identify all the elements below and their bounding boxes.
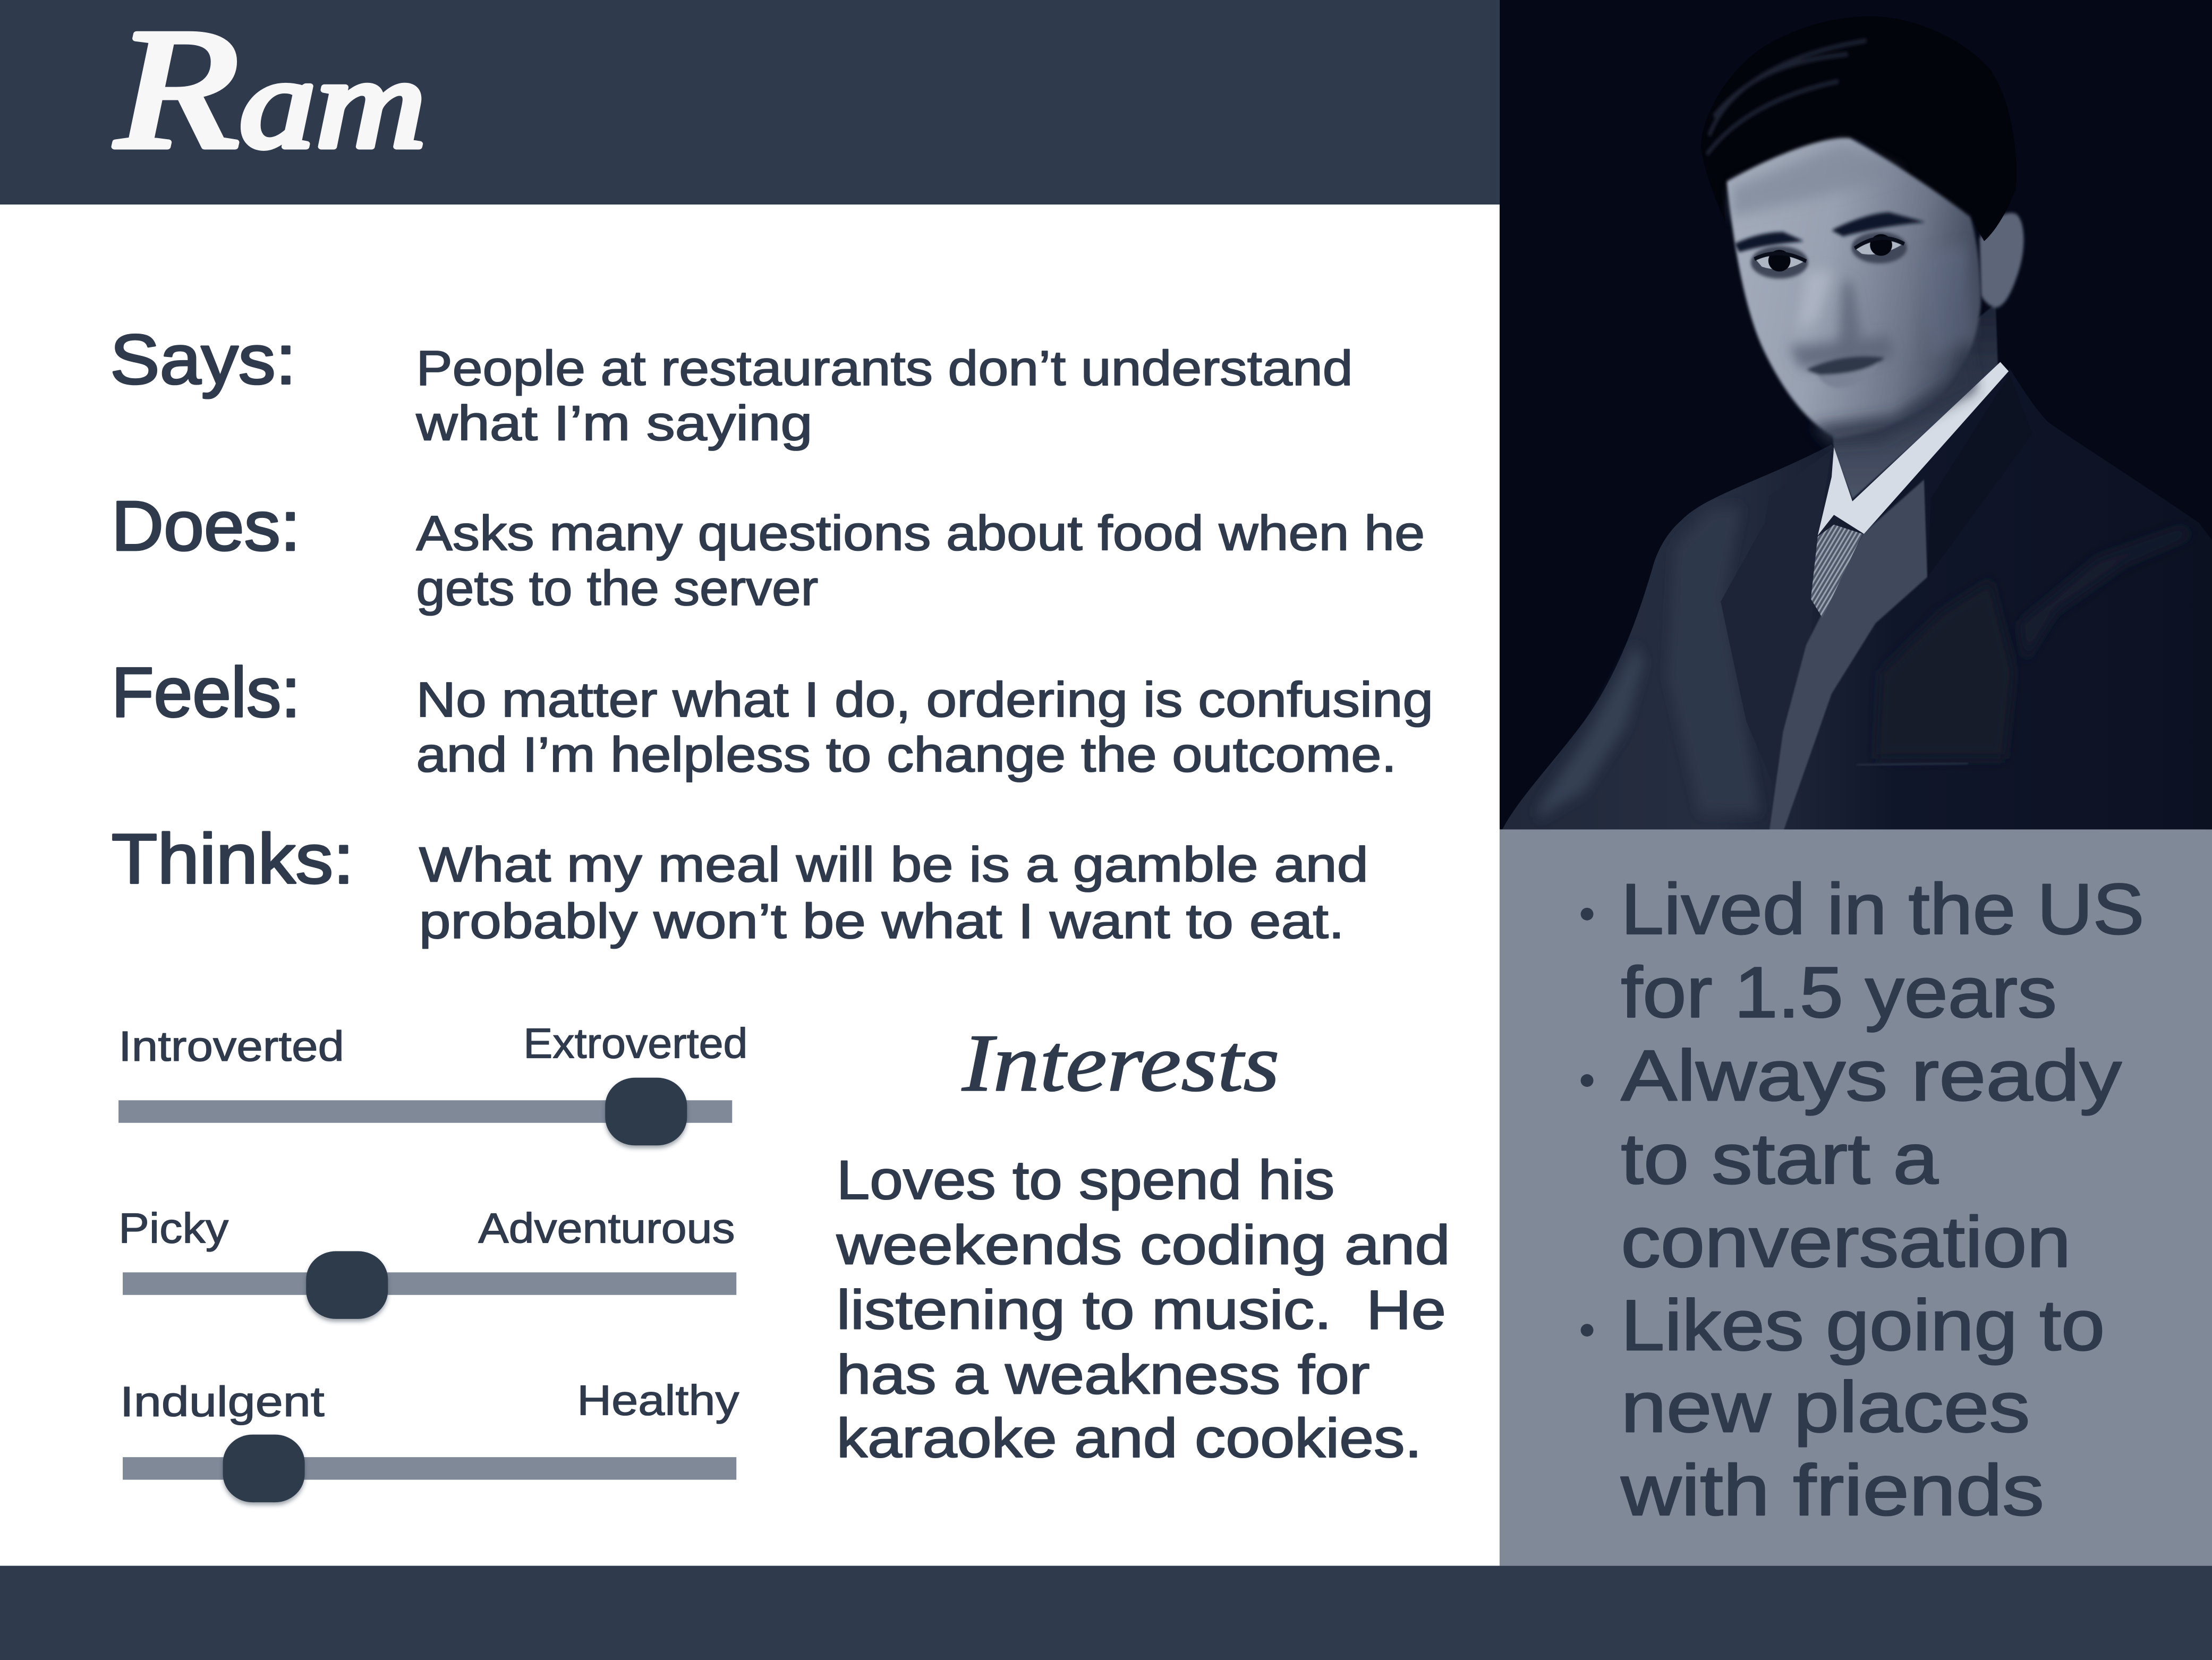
- interests text: has a weakness for: [837, 1344, 1370, 1406]
- interests text: karaoke and cookies.: [837, 1407, 1422, 1469]
- eyes: [1751, 232, 1907, 278]
- thinks text: [419, 837, 1368, 949]
- slider: indulgent to healthy: Healthy: [577, 1376, 739, 1424]
- lips: [1806, 356, 1885, 388]
- face: [1726, 138, 1981, 438]
- neck: [1832, 303, 1998, 499]
- says text: People at restaurants don’t understand: [416, 340, 1353, 396]
- slider: indulgent to healthy: Indulgent: [120, 1378, 325, 1425]
- left lapel: [1721, 571, 1752, 735]
- bullet list: Always ready: [1621, 1035, 2122, 1116]
- jacket: [1501, 369, 2212, 832]
- slider: picky to adventurous: Picky: [118, 1205, 228, 1252]
- says text: what I’m saying: [415, 396, 813, 451]
- ear: [1979, 213, 2024, 308]
- right lapel: [1928, 504, 1931, 560]
- interests text: listening to music. He: [837, 1279, 1446, 1340]
- feels text: No matter what I do, ordering is confusing: [416, 672, 1433, 727]
- says text: [415, 340, 1353, 451]
- bullet list: Likes going to: [1621, 1284, 2105, 1365]
- feels text: [416, 672, 1433, 782]
- bullet list: for 1.5 years: [1621, 952, 2057, 1033]
- heading: interests: Interests: [962, 1018, 1280, 1109]
- slider: introverted to extroverted: Extroverted: [523, 1020, 747, 1067]
- bullet list: conversation: [1621, 1202, 2071, 1282]
- sleeve highlights: [1538, 507, 2194, 819]
- slider: picky to adventurous: Adventurous: [478, 1205, 735, 1252]
- panel: background facts: [1500, 829, 2212, 1566]
- interests text: Loves to spend his: [837, 1149, 1334, 1211]
- heading: says: Says:: [110, 320, 296, 399]
- hair: [1701, 16, 2017, 241]
- does text: Asks many questions about food when he: [416, 506, 1425, 561]
- row: thinks: [112, 820, 1368, 949]
- bullet list: with friends: [1620, 1450, 2044, 1530]
- bullet list: [1581, 869, 2145, 1530]
- interests text: [836, 1149, 1450, 1469]
- heading: does: Does:: [112, 487, 301, 566]
- pocket: [1857, 763, 1968, 765]
- heading: thinks: Thinks:: [112, 820, 354, 898]
- thinks text: What my meal will be is a gamble and: [419, 837, 1368, 892]
- shirt collar: [1818, 362, 2009, 535]
- slider: indulgent to healthy: [120, 1376, 739, 1502]
- thinks text: probably won’t be what I want to eat.: [419, 893, 1345, 949]
- photo: portrait of Ram: [1500, 0, 2212, 832]
- row: feels: [112, 653, 1433, 782]
- bullet list: to start a: [1621, 1118, 1939, 1199]
- header band: [0, 0, 1500, 205]
- white content panel: [0, 205, 1500, 1566]
- bullet list: new places: [1621, 1366, 2030, 1447]
- feels text: and I’m helpless to change the outcome.: [416, 727, 1397, 782]
- does text: gets to the server: [416, 560, 818, 616]
- bullet list: Lived in the US: [1621, 869, 2145, 949]
- slider: introverted to extroverted: Introverted: [118, 1023, 344, 1070]
- footer band: [0, 1566, 2212, 1660]
- slider: introverted to extroverted: [118, 1020, 747, 1145]
- eyebrows: [1734, 212, 1926, 252]
- heading: feels: Feels:: [112, 653, 301, 732]
- does text: [416, 506, 1425, 616]
- interests text: weekends coding and: [836, 1214, 1450, 1275]
- tie: [1811, 525, 1862, 618]
- slider: picky to adventurous: [118, 1205, 736, 1319]
- face shading: [1732, 143, 1977, 445]
- row: says: [110, 320, 1353, 451]
- row: does: [112, 487, 1425, 616]
